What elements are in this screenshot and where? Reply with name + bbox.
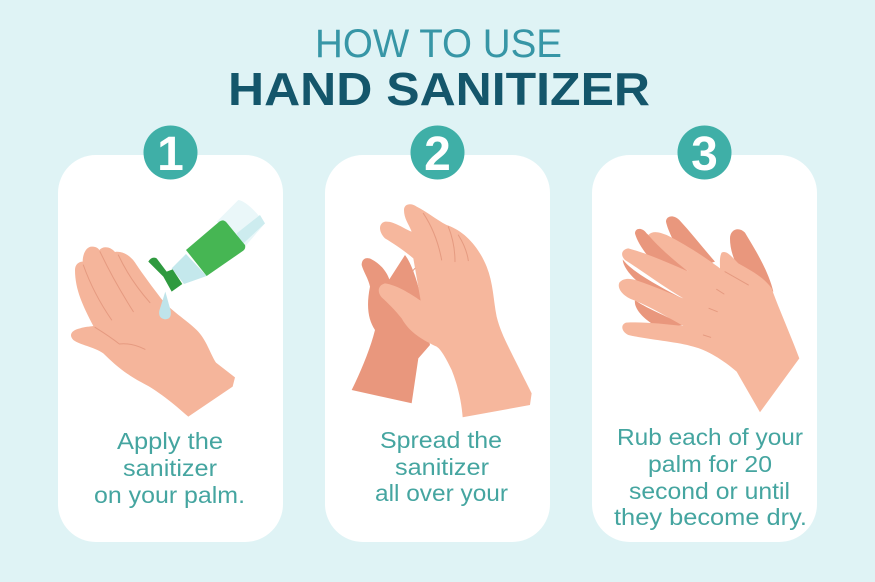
panel: step 3 bbox=[592, 126, 817, 542]
step 3 text bbox=[614, 424, 807, 530]
illustration: hand with sanitizer bottle bbox=[71, 200, 265, 417]
step 2 text bbox=[375, 427, 508, 506]
panel: step 2 bbox=[325, 126, 550, 542]
step 2 text: sanitizer bbox=[395, 454, 489, 480]
title: HAND SANITIZER bbox=[228, 63, 650, 115]
number badge 2 bbox=[410, 126, 464, 181]
step 1 text bbox=[94, 428, 245, 508]
step 2 text: Spread the bbox=[380, 427, 502, 453]
step 3 text: they become dry. bbox=[614, 504, 807, 530]
step 3 text: second or until bbox=[629, 478, 790, 504]
illustration: hands spreading bbox=[352, 204, 532, 417]
illustration: rubbing hands bbox=[619, 216, 799, 412]
title bbox=[228, 22, 650, 115]
panel: step 1 bbox=[58, 126, 283, 542]
number badge 1 bbox=[144, 126, 198, 181]
step 3 text: Rub each of your bbox=[617, 424, 803, 450]
step 3 text: palm for 20 bbox=[648, 451, 772, 477]
step 1 text: Apply the bbox=[117, 428, 223, 454]
number badge 2: 2 bbox=[424, 128, 451, 181]
step 1 text: sanitizer bbox=[123, 455, 217, 481]
number badge 3: 3 bbox=[691, 128, 718, 181]
title: HOW TO USE bbox=[315, 22, 562, 66]
number badge 3 bbox=[678, 126, 732, 181]
step 1 text: on your palm. bbox=[94, 482, 245, 508]
number badge 1: 1 bbox=[157, 128, 184, 181]
step 2 text: all over your bbox=[375, 480, 508, 506]
